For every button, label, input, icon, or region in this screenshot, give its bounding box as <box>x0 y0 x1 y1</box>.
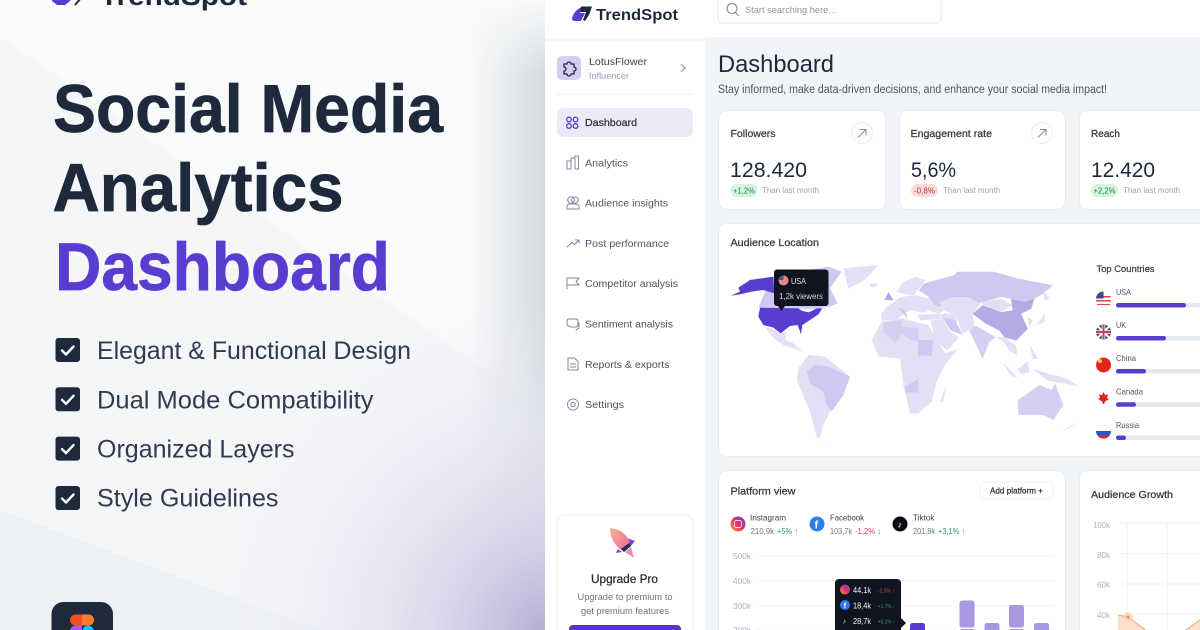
platform: instagram <box>730 512 798 536</box>
country: Canada <box>1096 386 1200 407</box>
chart tooltip <box>835 579 906 630</box>
page heading: Dashboard <box>718 51 834 78</box>
platform: facebook: f <box>814 520 818 532</box>
icon: figma badge <box>52 602 113 630</box>
profile: Influencer <box>589 71 629 81</box>
nav: dashboard active: Dashboard <box>585 117 637 129</box>
app logo: TrendSpot <box>596 7 678 24</box>
chart tooltip: ♪ <box>842 618 846 626</box>
panel: audience location: Audience Location <box>730 237 819 249</box>
platform: facebook <box>810 512 881 536</box>
nav: reports and exports: Reports & exports <box>585 359 670 371</box>
platform: tiktok: ♪ <box>898 520 902 530</box>
chart tooltip: 44,1k <box>853 585 872 595</box>
top countries list <box>1096 264 1200 440</box>
nav: post performance: Post performance <box>585 238 669 250</box>
country: UK: UK <box>1116 320 1126 330</box>
title <box>52 71 444 305</box>
sidebar navigation <box>557 108 693 411</box>
line chart: 40k <box>1097 610 1111 620</box>
kpi card: followers: 128.420 <box>730 159 807 182</box>
kpi card: engagement rate: Engagement rate <box>910 128 992 140</box>
profile: LotusFlower <box>589 56 647 68</box>
nav: settings <box>568 399 624 411</box>
title: Social Media <box>53 71 444 147</box>
platform: tiktok <box>892 512 965 536</box>
panel: platform view <box>718 470 1066 630</box>
upgrade pro card <box>557 515 693 630</box>
kpi card: followers: +1,2% <box>733 186 755 196</box>
kpi card: engagement rate: Than last month <box>943 186 1000 195</box>
country: Canada: Canada <box>1116 386 1143 396</box>
kpi card: followers: Than last month <box>762 186 819 195</box>
title: Dashboard <box>55 229 390 305</box>
dashboard window background <box>545 0 1200 630</box>
panel: platform view: Platform view <box>730 486 796 498</box>
line chart: 80k <box>1097 550 1111 560</box>
nav: audience insights: Audience insights <box>585 198 668 210</box>
nav: analytics <box>567 156 628 169</box>
top cropped logo <box>52 0 247 11</box>
country: China <box>1096 353 1200 374</box>
add platform button <box>980 482 1053 499</box>
chart tooltip: -2,5% ↑ <box>878 588 895 594</box>
country: USA: USA <box>1116 287 1131 297</box>
kpi card: followers <box>718 110 886 210</box>
search box: Start searching here... <box>745 5 836 16</box>
map tooltip: USA <box>774 270 828 311</box>
country: Russia: Russia <box>1116 420 1139 430</box>
kpi card: reach: Reach <box>1091 128 1120 140</box>
kpi card: engagement rate: -0,8% <box>914 186 935 196</box>
bar chart: 400k <box>733 576 752 586</box>
upgrade pro card: Upgrade Pro <box>591 574 658 586</box>
kpi card: reach: +2,2% <box>1094 186 1116 196</box>
item: dual mode: Dual Mode Compatibility <box>97 386 374 414</box>
platform: facebook: Facebook <box>830 512 865 522</box>
country: USA <box>1096 287 1200 308</box>
kpi card: reach <box>1080 110 1200 210</box>
platform: tiktok: Tiktok <box>913 512 935 522</box>
platform: tiktok: 201,8k <box>913 526 936 536</box>
platform: facebook: 103,7k <box>830 526 853 536</box>
country: UK <box>1096 320 1200 340</box>
platform: instagram: +5% ↑ <box>777 526 798 536</box>
left background panel <box>0 0 545 630</box>
line chart: 100k <box>1093 520 1111 530</box>
panel: audience growth <box>1080 470 1200 630</box>
profile <box>557 56 693 94</box>
panel: audience growth: Audience Growth <box>1091 489 1173 501</box>
chart tooltip: +1,7% ↑ <box>878 604 895 610</box>
country: Russia <box>1096 420 1200 440</box>
platform: instagram: 210,9k <box>750 526 775 536</box>
page heading <box>718 51 1107 96</box>
kpi card: engagement rate: 5,6% <box>911 159 956 182</box>
chart tooltip: +5,1% ↑ <box>878 620 895 626</box>
search box <box>718 0 941 23</box>
item: elegant design: Elegant & Functional Design <box>97 337 411 365</box>
bar chart: 500k <box>733 551 752 561</box>
bar chart: 300k <box>733 601 752 611</box>
line chart: 60k <box>1097 580 1111 590</box>
page heading: Stay informed, make data-driven decisions, and enhance your social media impact! <box>718 84 1107 96</box>
item: style guidelines: Style Guidelines <box>97 485 278 513</box>
nav: competitor analysis: Competitor analysis <box>585 278 678 290</box>
map tooltip: USA: 1,2k viewers <box>779 291 823 301</box>
nav: sentiment analysis: Sentiment analysis <box>585 318 673 330</box>
map: eurasia <box>870 272 1078 386</box>
nav: analytics: Analytics <box>585 157 628 169</box>
platform: facebook: -1,2% ↓ <box>855 526 881 536</box>
add platform button: Add platform + <box>990 486 1043 496</box>
item: organized layers: Organized Layers <box>97 436 294 464</box>
country: China: China <box>1116 353 1136 363</box>
feature checklist <box>56 337 411 513</box>
platform: instagram: Instagram <box>750 512 786 522</box>
map: americas, africa and oceania <box>731 265 1080 442</box>
chart tooltip: f <box>844 603 847 610</box>
nav: settings: Settings <box>585 399 624 411</box>
title: Analytics <box>52 150 344 226</box>
kpi card: reach: Than last month <box>1123 186 1180 195</box>
chart tooltip: 18,4k <box>853 600 872 610</box>
bar chart <box>733 551 1055 630</box>
kpi card: followers: Followers <box>730 128 776 140</box>
upgrade pro card: Upgrade to premium to <box>578 592 672 603</box>
world map <box>731 265 1080 442</box>
panel: audience location <box>718 224 1200 456</box>
line chart <box>1093 520 1200 630</box>
top countries list: Top Countries <box>1096 264 1155 274</box>
platform: tiktok: +3,1% ↑ <box>938 526 965 536</box>
icon: rocket <box>610 528 635 558</box>
map tooltip: USA: USA <box>791 276 806 286</box>
chart tooltip: 28,7k <box>853 616 872 626</box>
nav: dashboard active <box>557 108 693 137</box>
kpi card: reach: 12.420 <box>1091 159 1155 182</box>
upgrade pro card: get premium features <box>581 606 669 617</box>
kpi card: engagement rate <box>900 110 1066 210</box>
